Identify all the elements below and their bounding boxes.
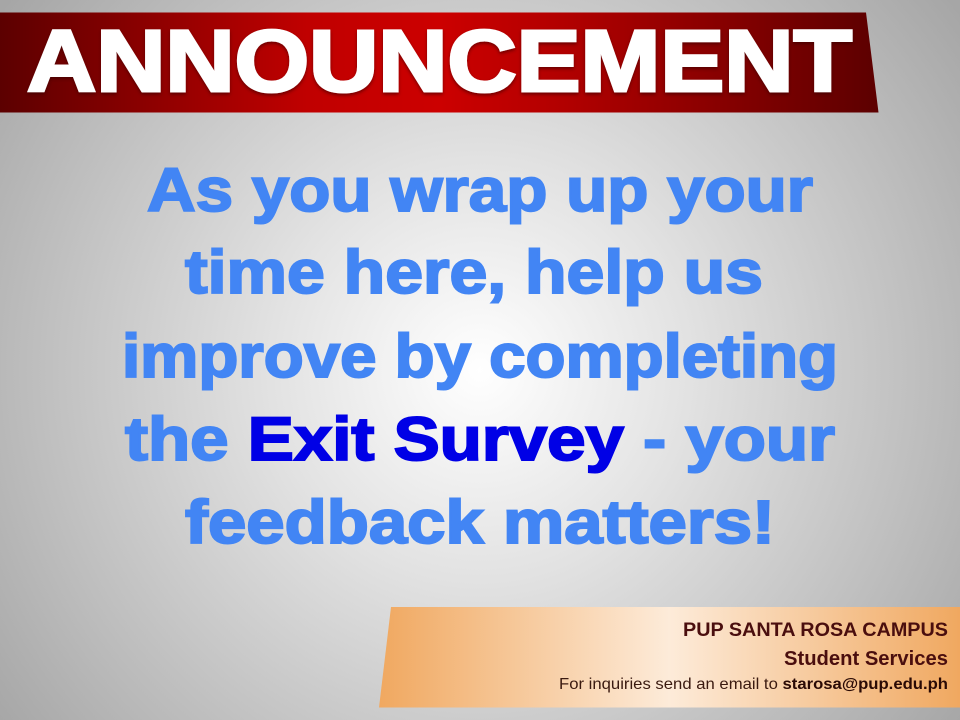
title: ANNOUNCEMENT	[27, 13, 852, 110]
department name: Student Services	[784, 648, 948, 670]
main message	[122, 156, 838, 556]
inquiry contact line: For inquiries send an email to starosa@pup.edu.ph	[559, 676, 948, 693]
footer panel	[379, 607, 960, 708]
campus name: PUP SANTA ROSA CAMPUS	[683, 620, 948, 641]
message line 5: feedback matters!	[185, 488, 775, 556]
footer ribbon	[379, 607, 960, 708]
message line 3: improve by completing	[122, 322, 838, 390]
message line 4 with highlighted Exit Survey: the Exit Survey - your	[125, 405, 835, 473]
message line 1: As you wrap up your	[147, 156, 813, 224]
banner	[0, 12, 878, 112]
banner ribbon	[0, 12, 878, 112]
message line 2: time here, help us	[185, 238, 763, 306]
